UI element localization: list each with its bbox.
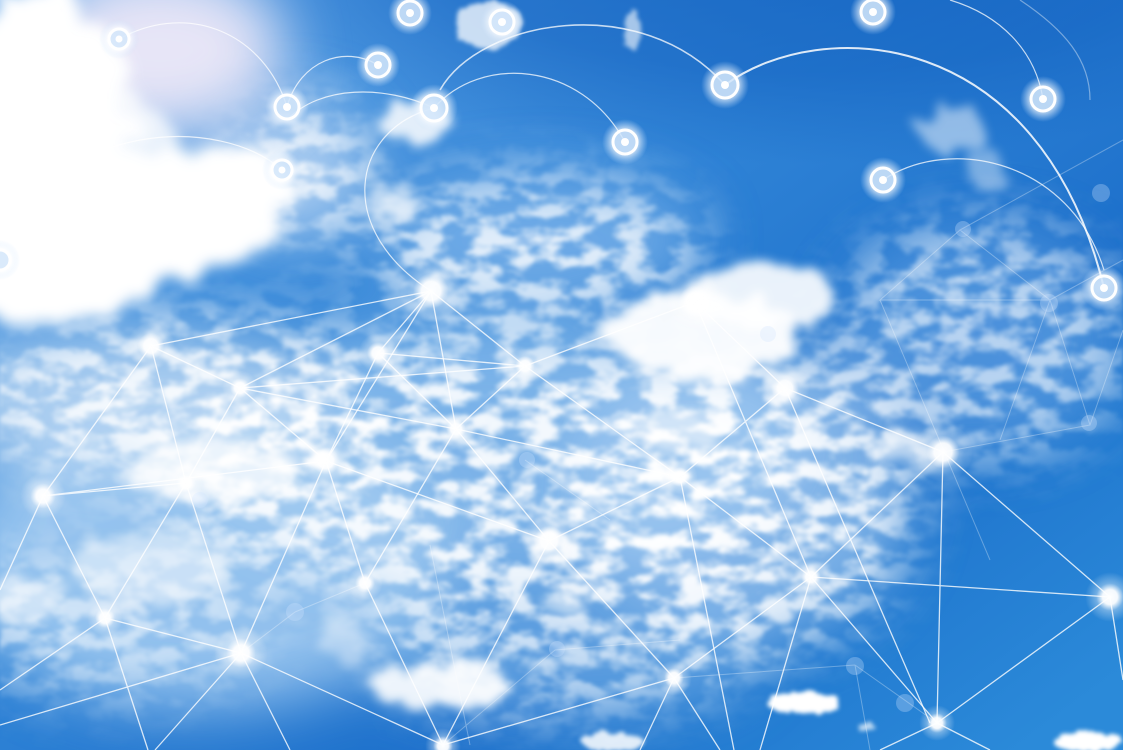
network: glowing mesh nodes bbox=[20, 259, 1123, 750]
network: lower mesh lines bbox=[0, 291, 1123, 750]
cloud: upper right bbox=[919, 108, 991, 152]
cloud: centre top bbox=[377, 98, 453, 142]
cloud: lower left bbox=[135, 438, 295, 502]
cloud: large white mass top left bbox=[0, 0, 290, 325]
cloud: central large bbox=[605, 291, 795, 379]
cloud: bottom centre bbox=[368, 663, 512, 707]
clouds: distinct white cumulus bbox=[0, 98, 1003, 707]
cloud: mid right bbox=[870, 434, 930, 466]
network: ringed nodes bbox=[0, 0, 1123, 311]
network: upper arcs bbox=[0, 0, 1104, 291]
cloud: small centre bbox=[366, 185, 414, 225]
tint: pale lavender sun haze bbox=[35, 0, 285, 135]
clouds: small wisps and bottom clouds bbox=[454, 1, 1122, 750]
network: faint background mesh bbox=[241, 140, 1123, 750]
network: faint background nodes bbox=[192, 184, 1110, 712]
